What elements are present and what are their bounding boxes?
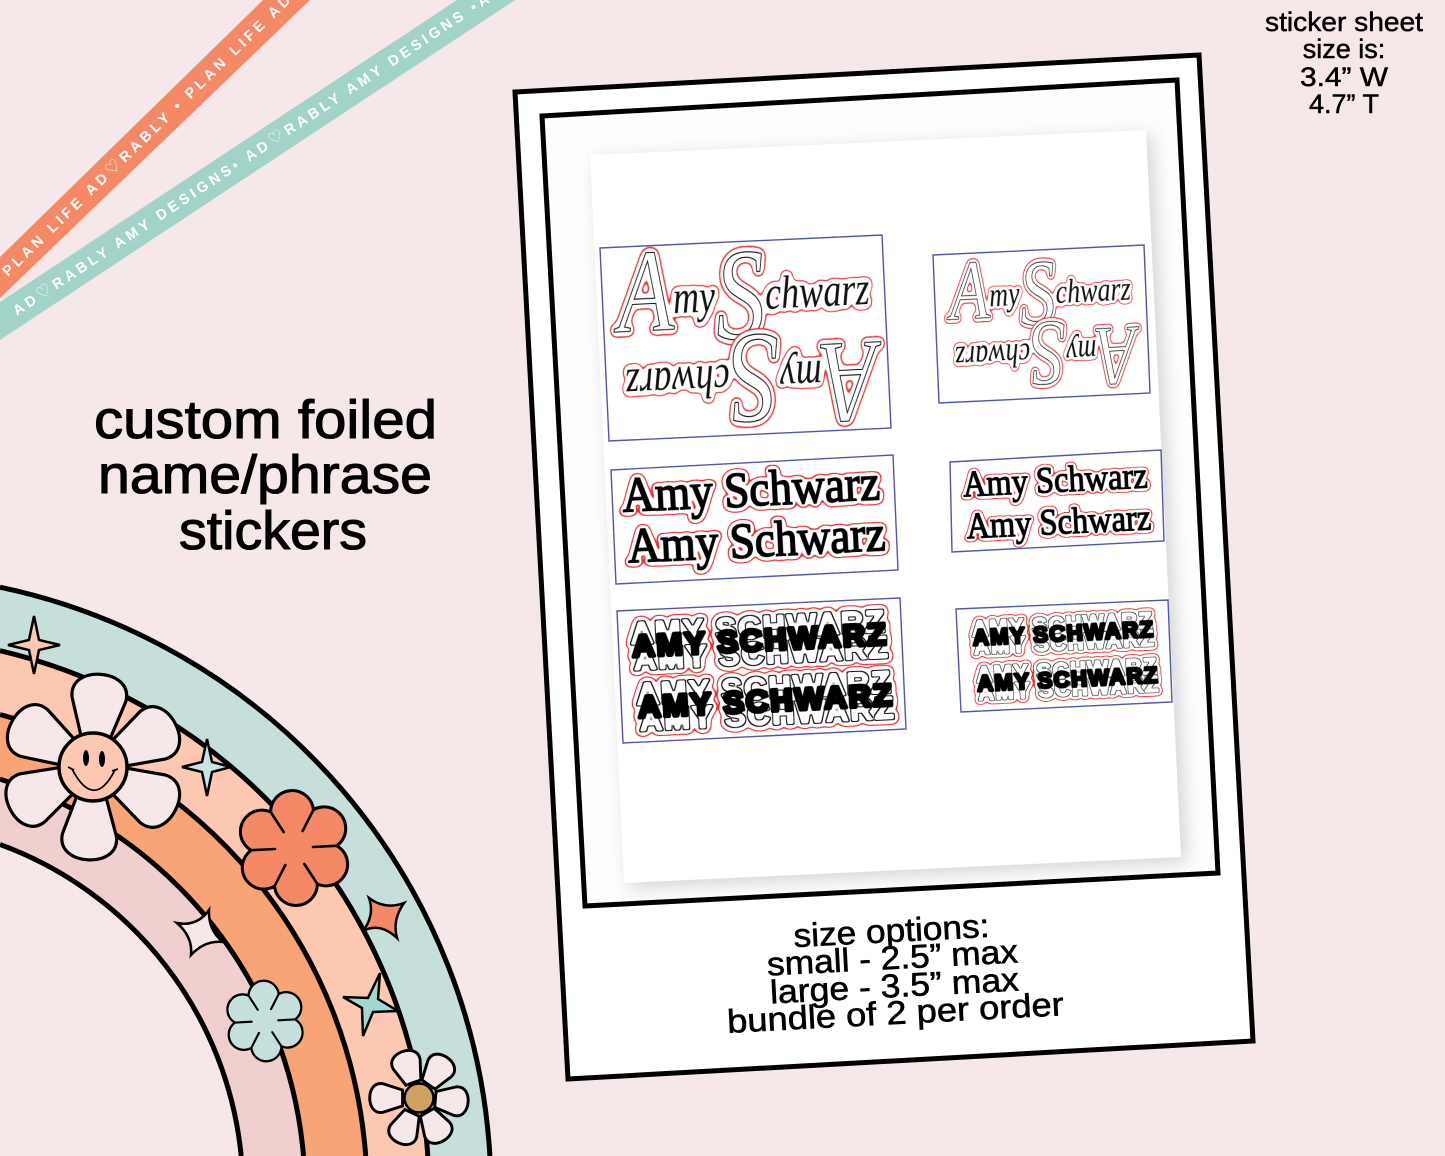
sticker sheet size note: sticker sheet [1265, 7, 1424, 37]
sticker: small script name: chwarz [1055, 269, 1132, 311]
sticker: large serif name [611, 454, 898, 584]
sticker: large bubble name: AMY SCHWARZ [631, 616, 887, 664]
ribbon: teal washi strip: AD♡RABLY AMY DESIGNS• AD♡RABLY AMY DESIGNS •A [9, 0, 493, 319]
rainbow illustration [0, 587, 490, 1156]
sticker sheet size note: size is: [1303, 34, 1385, 64]
sticker: large bubble name: AMY SCHWARZ [637, 677, 893, 725]
size options caption: bundle of 2 per order [726, 985, 1065, 1040]
sticker: small bubble name: AMY SCHWARZ [972, 617, 1154, 651]
sticker: small serif name: Amy Schwarz [966, 497, 1152, 547]
sticker: large script name: S [712, 223, 768, 368]
title: name/phrase [98, 445, 432, 505]
sticker: large script name: A [609, 224, 676, 358]
sticker: large bubble name [617, 598, 906, 743]
title [94, 390, 437, 561]
icon: daisy with smiley face [0, 672, 188, 861]
title: stickers [179, 501, 367, 561]
sticker: large script name: my [778, 349, 823, 403]
sticker: small script name: chwarz [954, 335, 1031, 377]
paper shadow [596, 135, 1187, 888]
icon: small daisy [370, 1047, 469, 1149]
sticker: large serif name: Amy Schwarz [621, 454, 881, 523]
sticker sheet paper [590, 130, 1181, 883]
sticker: small script name [933, 236, 1150, 411]
sticker: small serif name [950, 450, 1164, 552]
size options caption: size options: [793, 907, 990, 954]
sticker: large script name: my [672, 271, 717, 325]
inner frame [542, 80, 1218, 906]
size options caption: small - 2.5” max [766, 932, 1019, 983]
icon: white sparkle [177, 910, 223, 955]
sticker: small serif name: Amy Schwarz [962, 456, 1149, 506]
icon: coral sparkle [363, 898, 404, 938]
rainbow bands [0, 587, 490, 1156]
ribbon: coral washi strip: PLAN LIFE AD♡RABLY • PLAN LIFE AD [0, 0, 294, 280]
sticker sheet size note: 4.7” T [1309, 89, 1379, 119]
icon: teal star [343, 973, 398, 1036]
sticker: small script name: my [988, 275, 1021, 314]
panel: sticker sheet frame [515, 55, 1253, 1079]
sticker: large script name: chwarz [764, 264, 871, 320]
title: custom foiled [94, 390, 437, 450]
sticker: large script name: A [819, 316, 886, 450]
sticker: small bubble name: AMY SCHWARZ [977, 663, 1158, 696]
sticker: large script name [600, 214, 891, 460]
sticker sheet size note [1265, 7, 1424, 119]
icon: pale teal sparkle [182, 739, 231, 796]
sticker sheet size note: 3.4” W [1300, 62, 1389, 92]
size options caption: large - 3.5” max [769, 960, 1020, 1011]
size options caption [726, 907, 1065, 1040]
sticker: large script name: chwarz [624, 354, 731, 410]
outer frame [515, 55, 1253, 1079]
sticker: small bubble name [956, 600, 1172, 712]
sticker: small script name: A [942, 243, 992, 339]
icon: teal flower [227, 980, 303, 1062]
icon: coral flower [240, 789, 348, 907]
sticker: small script name: my [1065, 332, 1098, 372]
sticker: small script name: S [1017, 242, 1058, 346]
icon: peach sparkle [8, 616, 60, 674]
sticker: large serif name: Amy Schwarz [626, 505, 887, 574]
sticker: small script name: A [1094, 307, 1143, 404]
sticker: large script name: S [726, 305, 783, 451]
sticker: small script name: S [1028, 300, 1069, 405]
